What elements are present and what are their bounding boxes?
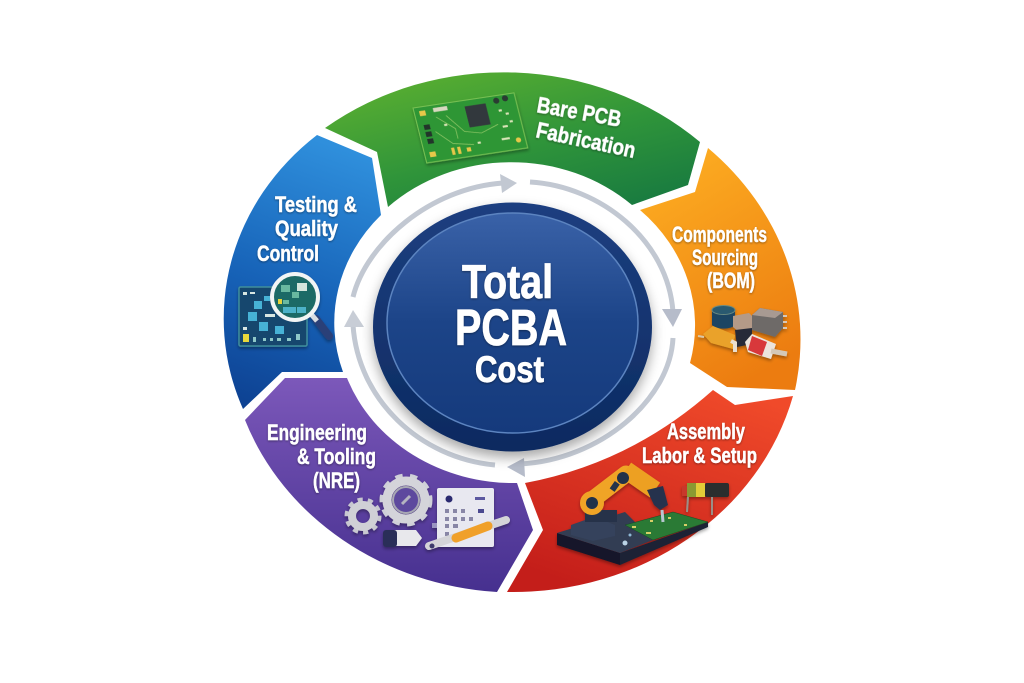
heading: Components Sourcing (BOM): Sourcing [692, 245, 758, 270]
arrow: testing to fabrication [353, 174, 517, 297]
heading: Components Sourcing (BOM): Components [672, 222, 767, 247]
heading: Engineering & Tooling (NRE): Engineering [267, 420, 367, 445]
panel: testing and quality control [224, 135, 381, 409]
heading: Components Sourcing (BOM) [672, 222, 767, 293]
panel: bare PCB fabrication [325, 72, 700, 207]
heading: Assembly Labor & Setup: Assembly [667, 419, 746, 444]
icon: robot arm placing parts on board [557, 470, 729, 565]
heading: Testing & Quality Control: Control [257, 241, 319, 266]
heading: Engineering & Tooling (NRE) [267, 420, 376, 493]
heading: Engineering & Tooling (NRE): (NRE) [313, 468, 360, 493]
heading: Fabrication: Fabrication [534, 117, 638, 163]
heading: Engineering & Tooling (NRE): & Tooling [297, 444, 376, 469]
arrow: engineering to testing [344, 310, 495, 465]
center hub: Total PCBA Cost [373, 202, 652, 452]
heading: Total: Total [462, 255, 553, 308]
heading: Bare PCB: Bare PCB [535, 92, 623, 132]
panel: assembly labor and setup [507, 390, 793, 592]
arrow: fabrication to components [530, 182, 682, 327]
icon: board under magnifying glass [239, 274, 329, 346]
heading: Assembly Labor & Setup: Labor & Setup [642, 443, 757, 468]
heading: Testing & Quality Control [257, 192, 357, 266]
heading: Testing & Quality Control: Quality [275, 216, 339, 241]
arrow: components to assembly [507, 338, 673, 477]
heading: Assembly Labor & Setup [642, 419, 757, 468]
panel: engineering and tooling [245, 378, 533, 592]
heading: Cost: Cost [475, 349, 544, 390]
arrows: gray circular flow ring [344, 174, 682, 477]
panel: components sourcing [640, 148, 800, 390]
icon: electronic components [698, 306, 787, 359]
heading: PCBA: PCBA [455, 299, 567, 356]
icon: green circuit board [413, 93, 528, 163]
heading: Testing & Quality Control: Testing & [275, 192, 357, 217]
heading: Components Sourcing (BOM): (BOM) [707, 268, 755, 293]
icon: gears, calipers and checklist [347, 477, 506, 548]
